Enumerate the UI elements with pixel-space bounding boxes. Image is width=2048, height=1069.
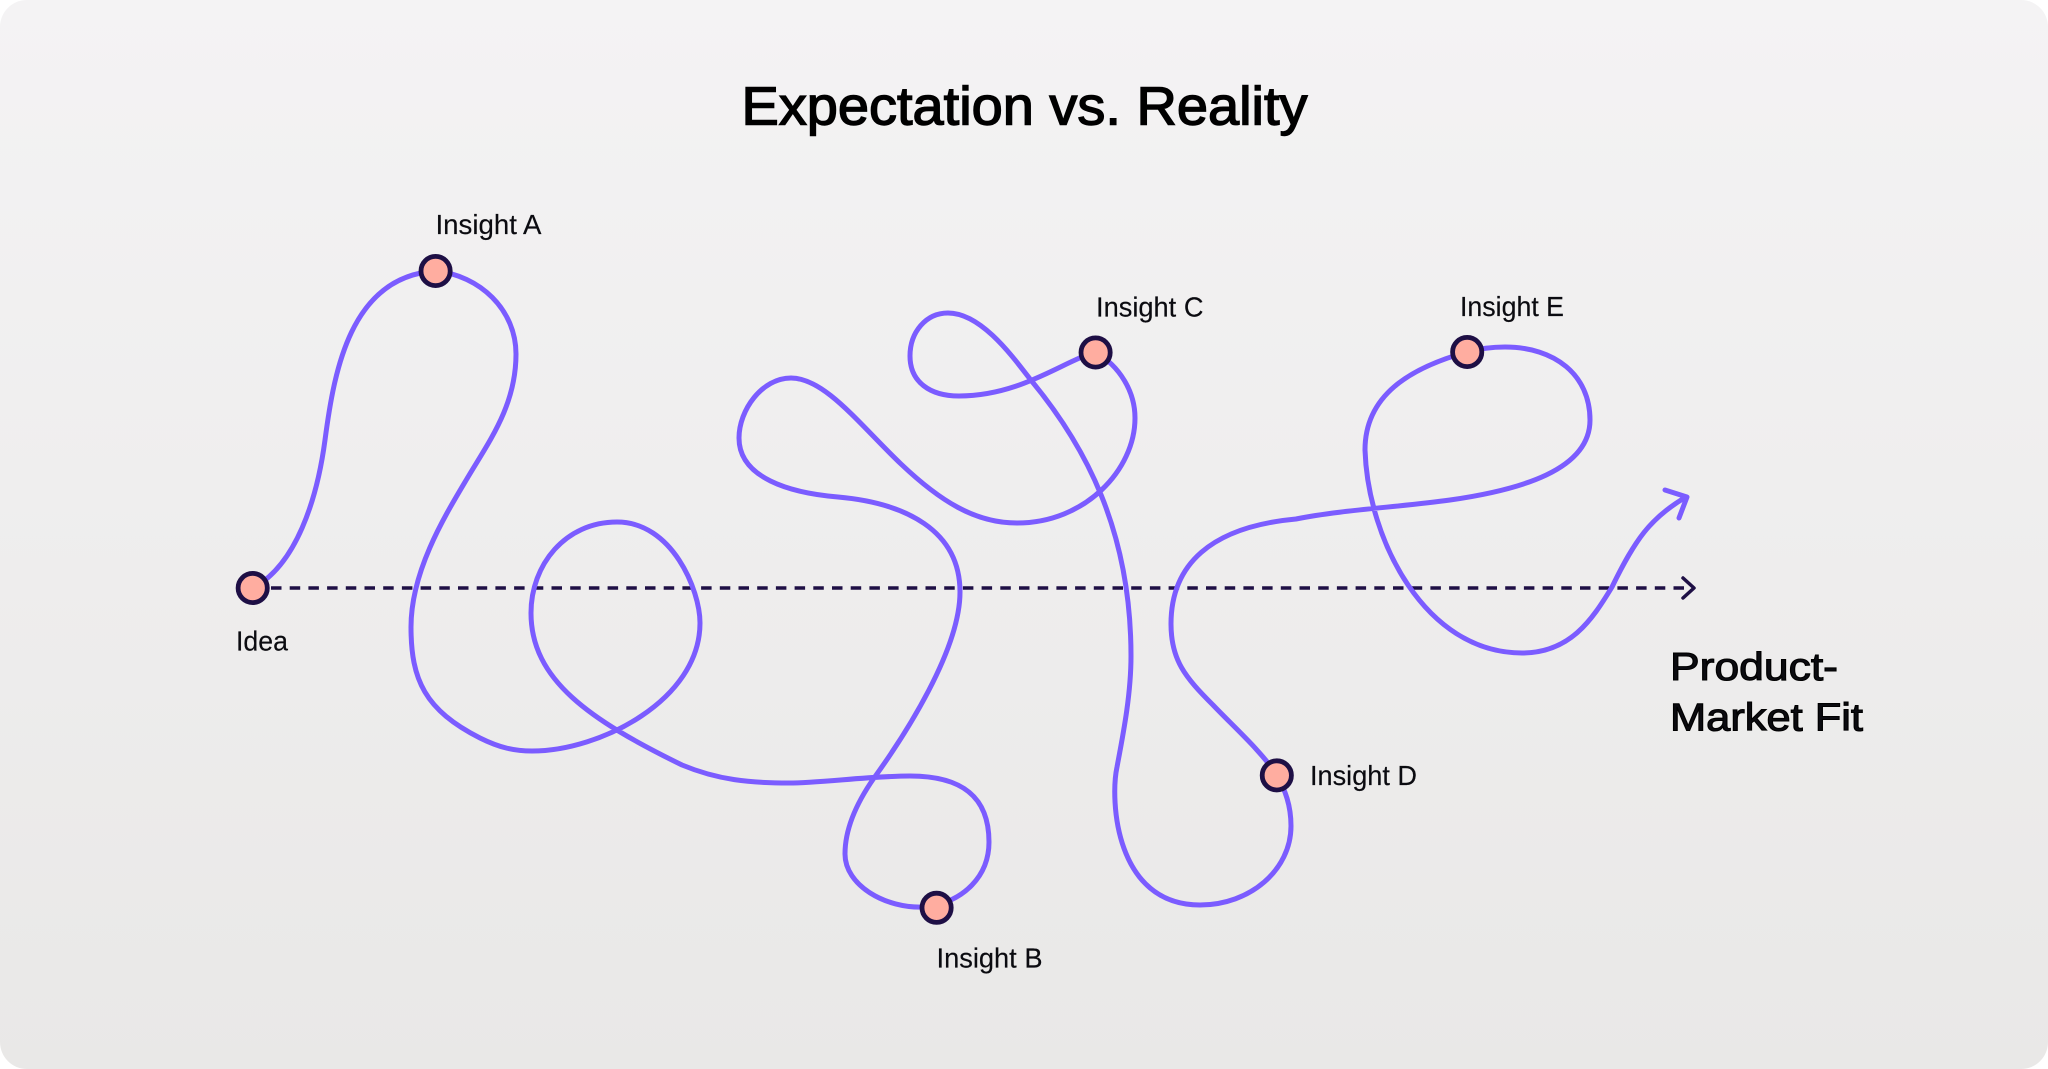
marker: Idea bbox=[238, 573, 267, 603]
label: Insight C: Insight C bbox=[1096, 292, 1204, 322]
expectation path: dashed straight arrow bbox=[271, 578, 1694, 598]
marker: Insight B bbox=[922, 893, 951, 922]
label: Insight B: Insight B bbox=[936, 942, 1042, 973]
reality path: winding purple arrow bbox=[253, 271, 1687, 907]
marker: Insight C bbox=[1081, 338, 1110, 367]
label: Idea: Idea bbox=[236, 626, 289, 656]
marker: Insight E bbox=[1453, 337, 1482, 367]
label: Insight E: Insight E bbox=[1460, 291, 1564, 322]
chart: expectation vs reality paths bbox=[236, 209, 1863, 973]
marker: Insight A bbox=[421, 256, 450, 286]
title: Expectation vs. Reality bbox=[742, 76, 1308, 136]
label: Product-Market Fit: Market Fit bbox=[1670, 697, 1863, 740]
label: Insight D: Insight D bbox=[1310, 760, 1417, 791]
marker: Insight D bbox=[1262, 761, 1291, 790]
label: Insight A: Insight A bbox=[436, 209, 542, 240]
label: Product-Market Fit: Product- bbox=[1670, 646, 1838, 689]
